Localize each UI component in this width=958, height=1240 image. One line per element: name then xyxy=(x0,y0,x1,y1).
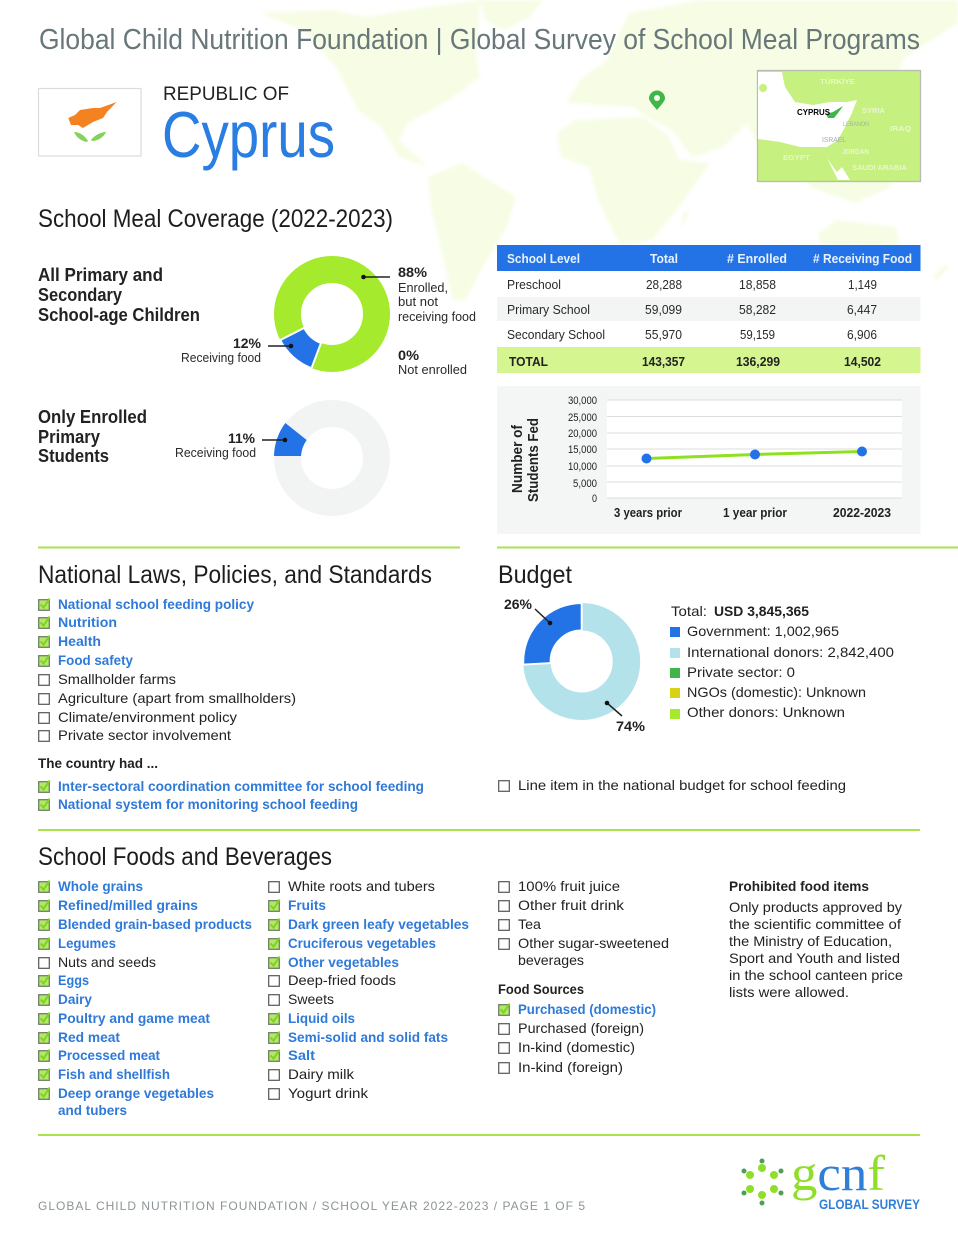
food list: column 2: White roots and tubers xyxy=(288,878,435,894)
donut labels: all children: 12% xyxy=(233,335,262,351)
food sources xyxy=(498,981,656,1075)
inset map: SYRIA xyxy=(862,108,885,115)
inset map: IRAQ xyxy=(890,126,912,133)
table: school level enrollment: 55,970 xyxy=(645,328,682,342)
heading: school foods: School Foods and Beverages xyxy=(38,843,332,871)
prohibited food items: the scientific committee of xyxy=(729,916,901,932)
table: school level enrollment: 1,149 xyxy=(848,278,877,292)
table: school level enrollment: Preschool xyxy=(507,278,561,292)
table: school level enrollment: School Level xyxy=(507,252,580,266)
food list: column 1: Nuts and seeds xyxy=(58,954,156,970)
line chart: number of students fed: 5,000 xyxy=(573,478,597,490)
prohibited food items: in the school canteen price xyxy=(729,967,903,983)
world map background xyxy=(259,0,958,300)
table: school level enrollment: Secondary School xyxy=(507,328,605,342)
food list: column 1: Fish and shellfish xyxy=(58,1066,170,1082)
inset map: JORDAN xyxy=(842,149,869,156)
budget legend: USD 3,845,365 xyxy=(714,603,809,619)
donut labels: all children: Enrolled, xyxy=(398,280,448,295)
food sources: In-kind (domestic) xyxy=(518,1039,635,1055)
checklist: laws and policies: Nutrition xyxy=(58,614,117,630)
food list: column 3 xyxy=(499,878,669,968)
checklist: coordination: Inter-sectoral coordination committee for school feeding xyxy=(58,778,424,794)
table: school level enrollment xyxy=(497,245,920,373)
line chart: number of students fed: 30,000 xyxy=(568,395,597,407)
prohibited food items: Prohibited food items xyxy=(729,878,869,894)
heading: all primary and secondary: All Primary and xyxy=(38,265,163,285)
heading: budget: Budget xyxy=(498,561,572,589)
food list: column 1: Red meat xyxy=(58,1029,120,1045)
food list: column 2: Deep-fried foods xyxy=(288,972,396,988)
table: school level enrollment: 59,159 xyxy=(740,328,775,342)
country name: Cyprus xyxy=(162,98,335,171)
inset map: TÜRKİYE xyxy=(820,77,855,86)
line chart: number of students fed: 2022-2023 xyxy=(833,506,891,520)
food list: column 2: Other vegetables xyxy=(288,954,399,970)
prohibited food items: Sport and Youth and listed xyxy=(729,950,900,966)
country name: REPUBLIC OF xyxy=(163,84,289,105)
donut chart: all children xyxy=(268,270,390,368)
checklist: laws and policies: Agriculture (apart from smallholders) xyxy=(58,690,296,706)
line chart: number of students fed: 3 years prior xyxy=(614,506,682,520)
checklist: laws and policies: Climate/environment policy xyxy=(58,709,237,725)
heading: national laws: National Laws, Policies, and Standards xyxy=(38,561,432,589)
checklist: laws and policies: Health xyxy=(58,633,101,649)
food list: column 1: Eggs xyxy=(58,972,89,988)
checklist: budget line item: Line item in the national budget for school feeding xyxy=(518,777,846,793)
donut labels: all children: Receiving food xyxy=(181,350,261,365)
donut labels: all children: Not enrolled xyxy=(398,362,467,377)
food list: column 2: Liquid oils xyxy=(288,1010,355,1026)
food list: column 1: and tubers xyxy=(58,1102,127,1118)
food sources: Purchased (foreign) xyxy=(518,1020,644,1036)
food list: column 1 xyxy=(39,878,252,1118)
budget legend xyxy=(670,603,894,720)
checklist: laws and policies: National school feeding policy xyxy=(58,596,254,612)
checklist: coordination: National system for monitoring school feeding xyxy=(58,796,358,812)
donut labels: all children xyxy=(181,264,476,377)
food list: column 2: Dairy milk xyxy=(288,1066,355,1082)
prohibited food items xyxy=(729,878,903,1000)
donut chart: enrolled students xyxy=(262,414,376,502)
budget legend: NGOs (domestic): Unknown xyxy=(687,684,866,700)
food list: column 2: Fruits xyxy=(288,897,326,913)
budget legend: Other donors: Unknown xyxy=(687,704,845,720)
prohibited food items: Only products approved by xyxy=(729,899,902,915)
table: school level enrollment: 58,282 xyxy=(739,303,776,317)
food sources: Food Sources xyxy=(498,981,584,997)
food list: column 3: Other fruit drink xyxy=(518,897,625,913)
heading: only enrolled: Primary xyxy=(38,427,100,447)
checklist: laws and policies: Private sector involvement xyxy=(58,727,231,743)
donut labels: enrolled students xyxy=(175,430,256,460)
table: school level enrollment: 6,906 xyxy=(847,328,877,342)
checklist: laws and policies xyxy=(39,596,296,743)
line chart: number of students fed xyxy=(497,386,920,534)
table: school level enrollment: 6,447 xyxy=(847,303,877,317)
budget legend: Total: xyxy=(671,603,707,619)
table: school level enrollment: # Enrolled xyxy=(727,252,787,266)
donut labels: all children: but not xyxy=(398,294,438,309)
checklist: laws and policies: Smallholder farms xyxy=(58,671,176,687)
donut chart: budget: 26% xyxy=(504,596,533,612)
table: school level enrollment: Primary School xyxy=(507,303,590,317)
table: school level enrollment: TOTAL xyxy=(509,355,548,369)
donut chart: budget xyxy=(504,596,646,734)
heading: only enrolled: Only Enrolled xyxy=(38,407,147,427)
food list: column 2 xyxy=(269,878,469,1101)
budget legend: Private sector: 0 xyxy=(687,664,795,680)
food list: column 2: Cruciferous vegetables xyxy=(288,935,436,951)
line chart: number of students fed: 0 xyxy=(592,493,597,505)
heading: only enrolled: Students xyxy=(38,446,109,466)
heading: all primary and secondary xyxy=(38,265,200,325)
food list: column 3: beverages xyxy=(518,952,584,968)
food sources: Purchased (domestic) xyxy=(518,1001,656,1017)
table: school level enrollment: 136,299 xyxy=(736,355,780,369)
food list: column 2: Salt xyxy=(288,1047,315,1063)
line chart: number of students fed: 20,000 xyxy=(568,428,597,440)
line chart: number of students fed: Number of xyxy=(510,425,526,493)
food list: column 1: Deep orange vegetables xyxy=(58,1085,214,1101)
food list: column 1: Whole grains xyxy=(58,878,143,894)
line chart: number of students fed: 10,000 xyxy=(568,461,597,473)
food list: column 3: Other sugar-sweetened xyxy=(518,935,669,951)
inset map: EGYPT xyxy=(783,155,811,162)
food list: column 3: 100% fruit juice xyxy=(518,878,620,894)
donut labels: enrolled students: 11% xyxy=(228,430,256,446)
food list: column 1: Refined/milled grains xyxy=(58,897,198,913)
donut chart: budget: 74% xyxy=(616,718,646,734)
table: school level enrollment: # Receiving Food xyxy=(813,252,912,266)
food sources: In-kind (foreign) xyxy=(518,1059,623,1075)
table: school level enrollment: 18,858 xyxy=(739,278,776,292)
heading: only enrolled xyxy=(38,407,147,466)
food list: column 1: Processed meat xyxy=(58,1047,160,1063)
logo: gcnf global survey: GLOBAL SURVEY xyxy=(819,1196,921,1212)
checklist: coordination xyxy=(39,778,424,812)
donut labels: all children: 0% xyxy=(398,347,420,363)
food list: column 2: Semi-solid and solid fats xyxy=(288,1029,448,1045)
table: school level enrollment: 59,099 xyxy=(645,303,682,317)
line chart: number of students fed: Students Fed xyxy=(526,418,542,502)
food list: column 2: Sweets xyxy=(288,991,334,1007)
donut labels: all children: receiving food xyxy=(398,309,476,324)
inset map: LEBANON xyxy=(843,122,869,128)
heading: school meal coverage: School Meal Coverage (2022-2023) xyxy=(38,205,393,233)
food list: column 1: Legumes xyxy=(58,935,116,951)
prohibited food items: lists were allowed. xyxy=(729,984,849,1000)
heading: all primary and secondary: School-age Children xyxy=(38,305,200,325)
flag of Cyprus xyxy=(38,88,141,156)
checklist: laws and policies: Food safety xyxy=(58,652,133,668)
footer: GLOBAL CHILD NUTRITION FOUNDATION / SCHOOL YEAR 2022-2023 / PAGE 1 OF 5 xyxy=(38,1199,585,1213)
logo: gcnf global survey: gcnf xyxy=(791,1145,885,1201)
table: school level enrollment: 14,502 xyxy=(844,355,881,369)
logo: gcnf global survey xyxy=(742,1145,921,1212)
line chart: number of students fed: 1 year prior xyxy=(723,506,787,520)
line chart: number of students fed: 15,000 xyxy=(568,444,597,456)
food list: column 2: Dark green leafy vegetables xyxy=(288,916,469,932)
food list: column 1: Poultry and game meat xyxy=(58,1010,210,1026)
table: school level enrollment: 143,357 xyxy=(642,355,685,369)
food list: column 2: Yogurt drink xyxy=(288,1085,369,1101)
table: school level enrollment: 28,288 xyxy=(646,278,682,292)
budget legend: International donors: 2,842,400 xyxy=(687,644,894,660)
inset map xyxy=(758,70,920,182)
budget legend: Government: 1,002,965 xyxy=(687,623,839,639)
inset map: ISRAEL xyxy=(822,137,846,144)
food list: column 1: Blended grain-based products xyxy=(58,916,252,932)
line chart: number of students fed: 25,000 xyxy=(568,412,597,424)
donut labels: all children: 88% xyxy=(398,264,428,280)
donut labels: enrolled students: Receiving food xyxy=(175,445,256,460)
prohibited food items: the Ministry of Education, xyxy=(729,933,892,949)
inset map: SAUDI ARABIA xyxy=(852,165,907,172)
food list: column 1: Dairy xyxy=(58,991,92,1007)
table: school level enrollment: Total xyxy=(650,252,678,266)
heading: all primary and secondary: Secondary xyxy=(38,285,122,305)
inset map: CYPRUS xyxy=(797,108,831,117)
map pin xyxy=(649,90,665,110)
food list: column 3: Tea xyxy=(518,916,541,932)
subheading: the country had: The country had ... xyxy=(38,755,158,771)
